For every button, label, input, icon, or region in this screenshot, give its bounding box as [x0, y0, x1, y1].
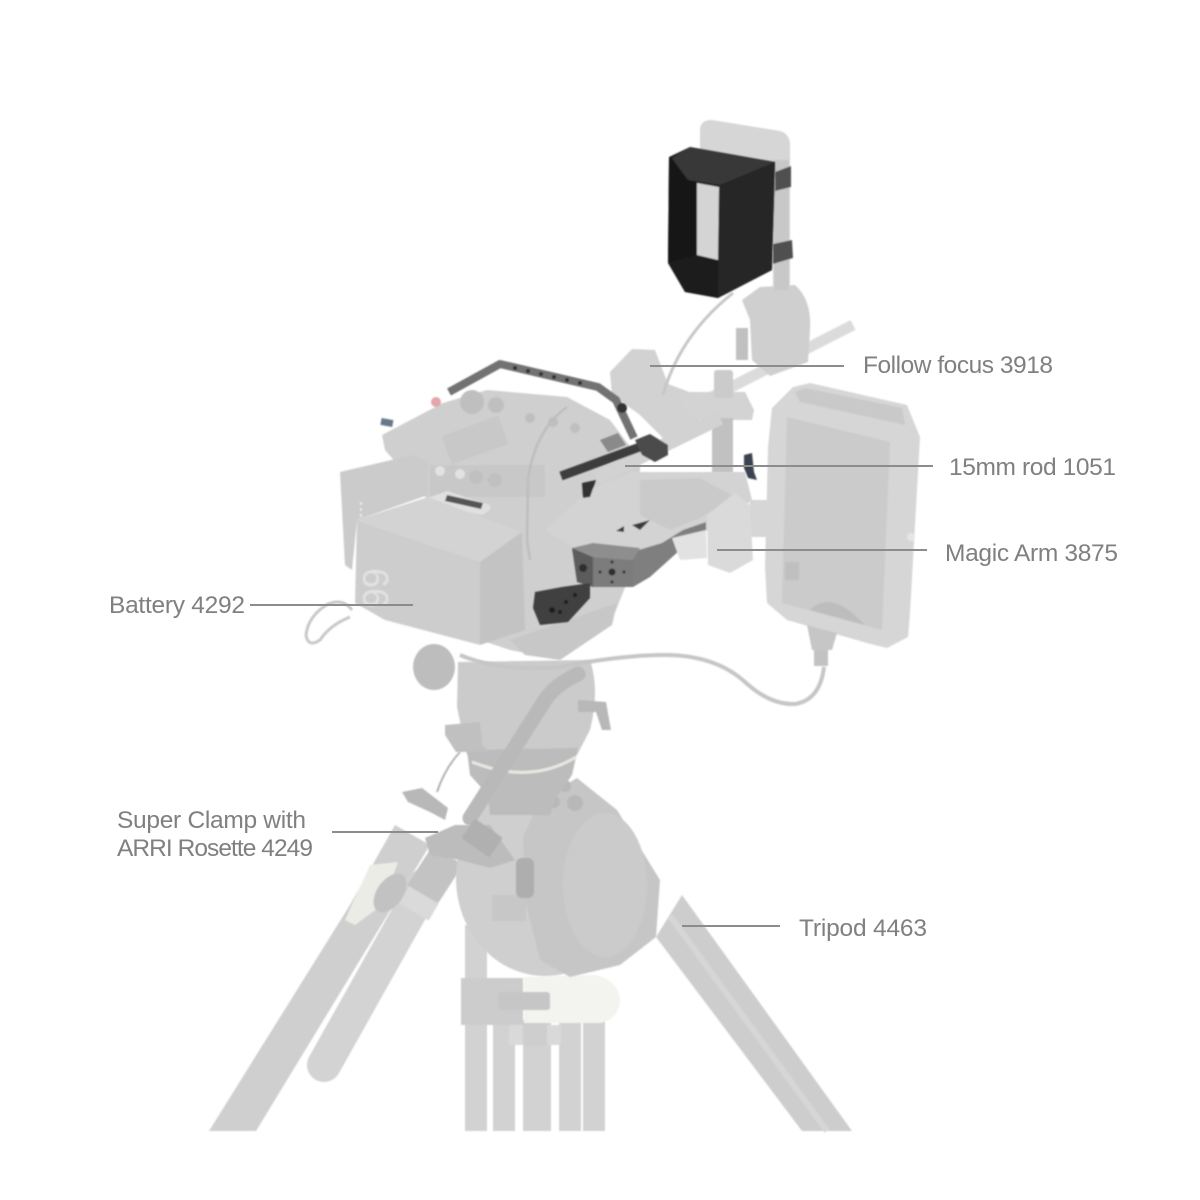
- monitor behind hood: [700, 120, 793, 290]
- pan bar: [470, 674, 578, 818]
- leader line: [332, 831, 438, 833]
- leader line: [682, 925, 780, 927]
- hood bottom inner: [668, 255, 718, 298]
- camera assembly: [306, 390, 640, 660]
- rear screw: [380, 418, 393, 427]
- leader line: [625, 465, 933, 467]
- dark lever: [744, 453, 757, 480]
- follow focus body: [610, 349, 700, 440]
- battery side: [480, 532, 525, 645]
- front battery face: [355, 520, 480, 645]
- grip handle: [324, 885, 425, 1065]
- hood top face: [672, 147, 775, 185]
- grip collar: [422, 855, 448, 895]
- clamp thumb tab: [600, 433, 626, 452]
- handle holes: [513, 366, 582, 385]
- side disc: [563, 813, 647, 957]
- brand tag: [492, 895, 526, 921]
- monitor cage: [765, 383, 920, 648]
- follow focus assembly: [610, 285, 853, 473]
- camera port row: [430, 465, 545, 497]
- rod clamp bar: [561, 447, 640, 476]
- 15mm rod: [597, 418, 720, 478]
- side rail: [690, 325, 853, 408]
- rod clamp cylinder: [635, 434, 668, 462]
- screen bottom arc: [810, 602, 865, 625]
- tripod bowl and hub: [456, 778, 660, 977]
- monitor cable: [663, 293, 733, 395]
- handle side screw: [617, 403, 627, 413]
- camera base fill: [382, 390, 640, 660]
- white lever wing: [345, 862, 398, 925]
- leader line: [650, 365, 844, 367]
- vertical rod: [712, 418, 733, 473]
- left tripod leg: [209, 825, 430, 1131]
- hood: monitor sunshade: [668, 147, 775, 298]
- monitor cable and plug: [460, 625, 837, 704]
- arm plate side: [572, 548, 593, 587]
- left pan knob: [413, 644, 455, 690]
- tripod: faded legs and spreader: [209, 825, 852, 1131]
- clamp thin cable: [437, 752, 460, 792]
- monitor screen: [782, 417, 890, 630]
- cable: [460, 655, 824, 704]
- lower strap: [773, 240, 793, 264]
- rear battery block: [340, 455, 428, 570]
- clamp arm: [402, 788, 448, 820]
- head body: [457, 660, 595, 755]
- front lock: [445, 722, 490, 752]
- screen notch: [785, 562, 799, 580]
- leg clamp lever: [461, 975, 620, 1046]
- side button: [907, 533, 915, 541]
- hood outline: [668, 147, 775, 298]
- bowl collar rings: [467, 748, 578, 815]
- hood window: [697, 183, 719, 260]
- leader line: [250, 604, 413, 606]
- leader line: [717, 549, 927, 551]
- rear battery LEDs: [360, 502, 362, 517]
- lever: [736, 328, 748, 360]
- plate cutouts: [632, 520, 650, 530]
- arm plate right section: [632, 522, 706, 587]
- arm plate holes: [579, 560, 626, 584]
- right lock lever: [578, 700, 611, 730]
- lower dark block: [533, 583, 590, 625]
- callout: super clamp with ARRI rosette 4249: [117, 807, 438, 862]
- label: Tripod 4463: [799, 915, 927, 942]
- label line one: Super Clamp with: [117, 807, 306, 834]
- upper strap: [775, 166, 791, 191]
- monitor column: [774, 160, 789, 290]
- arm connector: [750, 500, 769, 537]
- front plate: [523, 778, 660, 977]
- base plate: [510, 603, 617, 660]
- hood right face: [718, 162, 775, 298]
- small monitor body: [700, 120, 790, 290]
- clamp thumbscrew: [516, 858, 534, 898]
- hood left inner wall: [668, 157, 697, 263]
- clamp body: [425, 825, 515, 868]
- top handle: [449, 364, 634, 438]
- label line two: ARRI Rosette 4249: [117, 835, 313, 862]
- top cable: [527, 407, 567, 560]
- arm plate top: [572, 543, 640, 560]
- label: Battery 4292: [109, 592, 245, 619]
- monitor top grip: [795, 388, 905, 425]
- arm knob: [672, 530, 707, 560]
- SD slot: [430, 491, 490, 515]
- cage and top handle: [449, 364, 769, 625]
- light cage plate: [545, 472, 752, 560]
- round bowl: [456, 780, 634, 976]
- plug: [807, 625, 837, 650]
- top studs: [548, 780, 583, 811]
- front battery top: [357, 497, 522, 562]
- knurled knob: [367, 868, 413, 918]
- fluid head: [413, 644, 611, 818]
- battery logo: 66: [355, 568, 396, 608]
- label: 15mm rod 1051: [949, 454, 1116, 481]
- field monitor: [765, 383, 920, 648]
- shoe mount: [582, 480, 596, 498]
- magic arm knuckle: [707, 493, 753, 573]
- label: Magic Arm 3875: [945, 540, 1118, 567]
- right tripod leg: [656, 895, 852, 1131]
- small knob: [714, 370, 733, 398]
- crossbar: [680, 392, 754, 420]
- camera top controls: [431, 390, 580, 464]
- pivot mount: [742, 285, 810, 376]
- super clamp: [402, 752, 534, 898]
- label: Follow focus 3918: [863, 352, 1053, 379]
- arm plate front: [593, 557, 633, 587]
- battery cable: [306, 602, 352, 643]
- center legs: [465, 925, 605, 1131]
